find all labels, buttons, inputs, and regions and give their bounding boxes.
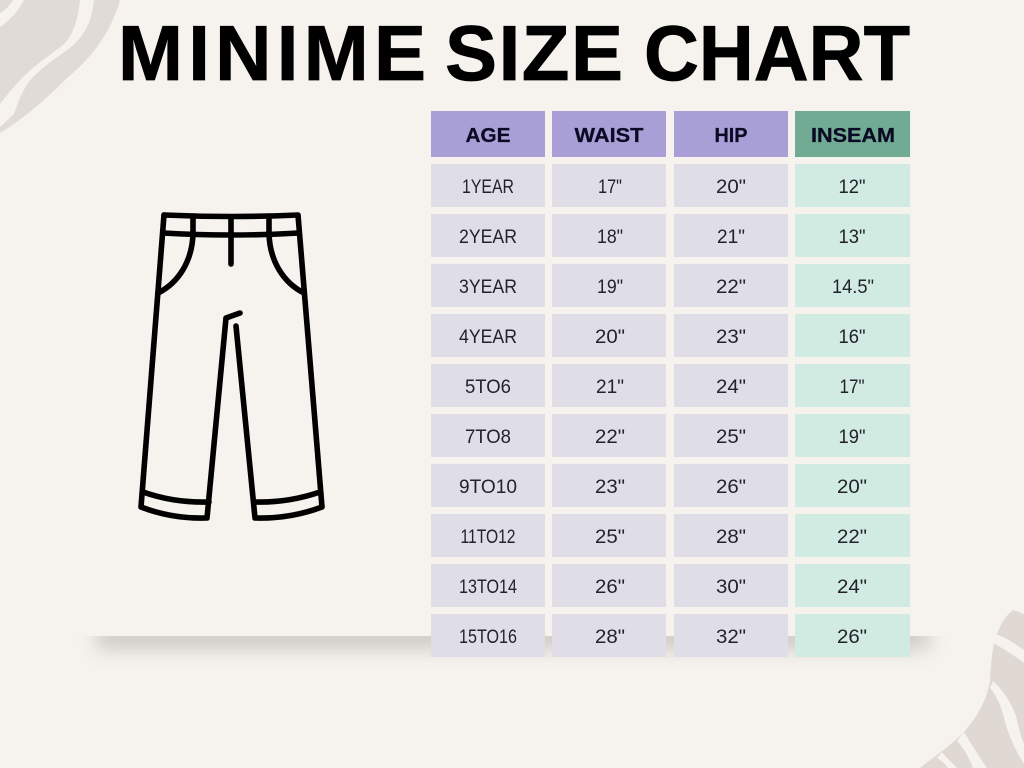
table row: 15 to 16: [431, 614, 910, 657]
table row: 3 year: [431, 264, 910, 307]
table row: 4 year: 23": [716, 327, 746, 348]
table row: 2 year: 21": [717, 227, 745, 248]
table row: 15 to 16: 15TO16: [459, 627, 517, 648]
table row: 13 to 14: 26": [595, 577, 625, 598]
table row: 5 to 6: 17": [840, 377, 864, 398]
table header: [431, 111, 910, 157]
table row: 2 year: 13": [838, 227, 866, 248]
table row: 9 to 10: 23": [595, 477, 625, 498]
table row: 11 to 12: [431, 514, 910, 557]
title: SIZE: [445, 9, 623, 97]
table row: 4 year: 4YEAR: [459, 327, 517, 348]
table row: 9 to 10: 20": [837, 477, 867, 498]
table row: 2 year: 18": [597, 227, 623, 248]
table header: HIP: [714, 125, 748, 147]
table row: 5 to 6: 5TO6: [465, 377, 511, 398]
table row: 5 to 6: [431, 364, 910, 407]
table row: 5 to 6: 21": [596, 377, 624, 398]
title: CHART: [644, 9, 910, 97]
table row: 11 to 12: 22": [837, 527, 867, 548]
table row: 1 year: 17": [598, 177, 622, 198]
table row: 7 to 8: 25": [716, 427, 746, 448]
table header: INSEAM: [811, 125, 895, 147]
table row: 4 year: [431, 314, 910, 357]
table row: 1 year: 20": [716, 177, 746, 198]
table row: 1 year: [431, 164, 910, 207]
table row: 3 year: 14.5": [832, 277, 874, 298]
table row: 3 year: 22": [716, 277, 746, 298]
table row: 11 to 12: 25": [595, 527, 625, 548]
table row: 3 year: 19": [597, 277, 623, 298]
table row: 13 to 14: [431, 564, 910, 607]
table row: 1 year: 1YEAR: [462, 177, 514, 198]
table row: 9 to 10: [431, 464, 910, 507]
title: [118, 9, 910, 97]
table row: 13 to 14: 30": [716, 577, 746, 598]
table header: AGE: [466, 125, 510, 147]
decoration: bottom-right leaf: [920, 610, 1024, 768]
table row: 5 to 6: 24": [716, 377, 746, 398]
table row: 7 to 8: 7TO8: [465, 427, 511, 448]
table row: 4 year: 20": [595, 327, 625, 348]
table row: 2 year: [431, 214, 910, 257]
table row: 9 to 10: 9TO10: [459, 477, 517, 498]
table row: 7 to 8: 22": [595, 427, 625, 448]
table row: 2 year: 2YEAR: [459, 227, 517, 248]
table row: 11 to 12: 28": [716, 527, 746, 548]
title: MINIME: [118, 9, 426, 97]
table row: 13 to 14: 24": [837, 577, 867, 598]
size table: [431, 111, 910, 657]
table row: 3 year: 3YEAR: [459, 277, 517, 298]
table row: 1 year: 12": [838, 177, 866, 198]
icon: pants line drawing: [141, 215, 322, 518]
table row: 15 to 16: 28": [595, 627, 625, 648]
table row: 15 to 16: 32": [716, 627, 746, 648]
table row: 7 to 8: [431, 414, 910, 457]
table row: 4 year: 16": [838, 327, 866, 348]
table header: WAIST: [574, 125, 644, 147]
table row: 7 to 8: 19": [838, 427, 866, 448]
table row: 13 to 14: 13TO14: [459, 577, 517, 598]
table row: 15 to 16: 26": [837, 627, 867, 648]
decoration: top-left leaf: [0, 0, 120, 133]
table row: 9 to 10: 26": [716, 477, 746, 498]
shadow beneath panel: [90, 636, 936, 657]
table row: 11 to 12: 11TO12: [460, 527, 516, 548]
